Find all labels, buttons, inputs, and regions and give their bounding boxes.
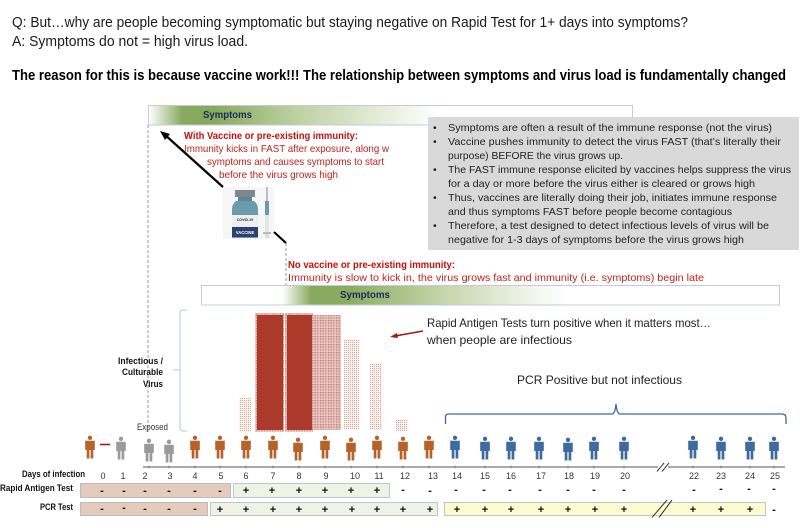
red text: with vaccine: With Vaccine or pre-existing immunity:: [184, 130, 358, 142]
row: rapid antigen test: -: [538, 484, 542, 496]
grey panel: key points: Vaccine pushes immunity to detect the virus FAST (that’s literally their: [448, 136, 782, 148]
dashed onset line: vaccinated: [147, 125, 149, 432]
day numbers: 7: [270, 471, 276, 481]
row: rapid antigen test: -: [167, 485, 171, 497]
row: rapid antigen test: -: [592, 484, 596, 496]
arrow: to infectious bars: [390, 331, 423, 338]
row: rapid antigen test: -: [719, 483, 723, 495]
day numbers: 22: [689, 471, 699, 481]
row: PCR test: -: [193, 503, 197, 515]
question and answer text: [12, 15, 688, 50]
day numbers: 11: [374, 471, 384, 481]
timeline axis: [143, 463, 785, 472]
grey panel: key points: negative for 1-3 days of symptoms before the virus grows high: [448, 234, 744, 246]
day numbers: 6: [243, 471, 249, 481]
row: rapid antigen test: -: [218, 485, 222, 497]
grey panel: key points: [428, 117, 799, 250]
icon: vaccine vial and syringe: COVID-19: [237, 218, 253, 222]
row: PCR test: +: [718, 504, 724, 516]
row: rapid antigen test: +: [348, 485, 354, 497]
row: PCR test: +: [349, 504, 355, 516]
dashed onset line: no vaccine: [285, 243, 287, 285]
question and answer text: Q: But…why are people becoming symptomatic but staying negative on Rapid Test for 1+ days into symptoms?: [12, 15, 688, 31]
arrow stub: vaccine to no-vaccine path: [274, 232, 286, 243]
day numbers: 17: [536, 471, 546, 481]
bar chart: infectious virus by day: [239, 313, 408, 432]
day numbers: 5: [218, 471, 224, 481]
people: blue non-infectious: [450, 436, 779, 460]
row: PCR test: +: [270, 504, 276, 516]
row: rapid antigen test: -: [747, 483, 751, 495]
people: orange infectious: [190, 436, 434, 460]
grey panel: key points: •: [433, 164, 437, 176]
day numbers: 12: [400, 471, 410, 481]
day numbers: 15: [480, 471, 490, 481]
row: PCR test: +: [592, 504, 598, 516]
callout: rapid antigen tests: when people are infectious: [426, 333, 572, 347]
row: rapid antigen test: -: [143, 485, 147, 497]
day numbers: 9: [323, 471, 329, 481]
day numbers: 23: [716, 471, 726, 481]
row: rapid antigen test: +: [322, 485, 328, 497]
bracket: PCR positive period: [446, 404, 786, 424]
row: rapid antigen test: +: [243, 485, 249, 497]
grey panel: key points: Therefore, a test designed to detect infectious levels of virus will be: [448, 220, 769, 232]
row: PCR test: +: [454, 504, 460, 516]
red text: no vaccine: [288, 259, 704, 284]
row: PCR test: +: [374, 504, 380, 516]
grey panel: key points: and thus symptoms FAST before people become contagious: [448, 206, 732, 218]
arrow: transmission: [100, 444, 110, 446]
label: infectious / culturable virus: Infectious /: [118, 356, 163, 367]
day numbers: 1: [120, 471, 126, 481]
label: infectious / culturable virus: [118, 356, 163, 390]
day numbers: 20: [620, 471, 630, 481]
row: PCR test: -: [772, 504, 776, 516]
row: PCR test: +: [322, 504, 328, 516]
label: days of infection: Days of infection: [22, 469, 85, 480]
row: rapid antigen test: +: [269, 485, 275, 497]
people row: [85, 436, 779, 462]
red text: with vaccine: symptoms and causes symptoms to start: [207, 156, 384, 168]
people: orange index case: [85, 436, 95, 458]
row: rapid antigen test: [0, 483, 776, 498]
day numbers: 4: [192, 471, 198, 481]
row: rapid antigen test: Rapid Antigen Test: [0, 483, 74, 494]
row: rapid antigen test: -: [508, 484, 512, 496]
day numbers: 3: [167, 471, 173, 481]
day numbers: 14: [452, 471, 462, 481]
grey panel: key points: •: [433, 136, 437, 148]
symptoms bar: no vaccine: [202, 286, 780, 305]
row: PCR test: +: [508, 504, 514, 516]
red text: with vaccine: Immunity kicks in FAST after exposure, along w: [184, 143, 389, 155]
callout: rapid antigen tests: Rapid Antigen Tests turn positive when it matters most…: [427, 316, 711, 330]
bracket: infectious virus: [173, 310, 187, 431]
row: rapid antigen test: -: [100, 485, 104, 497]
day numbers: 24: [745, 471, 755, 481]
row: PCR test: +: [482, 504, 488, 516]
row: rapid antigen test: +: [374, 485, 380, 497]
symptoms bar: vaccinated: [148, 106, 632, 125]
grey panel: key points: The FAST immune response elicited by vaccines helps suppress the virus: [448, 164, 791, 176]
day numbers: 19: [590, 471, 600, 481]
row: rapid antigen test: -: [193, 485, 197, 497]
row: rapid antigen test: -: [622, 484, 626, 496]
row: rapid antigen test: -: [401, 484, 405, 496]
row: PCR test: +: [427, 504, 433, 516]
row: rapid antigen test: -: [482, 484, 486, 496]
row: PCR test: [40, 500, 776, 518]
row: rapid antigen test: -: [122, 485, 126, 497]
row: PCR test: +: [690, 504, 696, 516]
row: PCR test: +: [747, 504, 753, 516]
grey panel: key points: •: [433, 220, 437, 232]
row: PCR test: -: [167, 503, 171, 515]
grey panel: key points: •: [433, 192, 437, 204]
grey panel: key points: purpose) BEFORE the virus grows up.: [448, 150, 623, 162]
red text: no vaccine: Immunity is slow to kick in, the virus grows fast and immunity (i.e. symptoms) begin late: [288, 272, 704, 284]
day numbers: 25: [770, 471, 780, 481]
red text: with vaccine: [184, 130, 389, 181]
row: PCR test: +: [400, 504, 406, 516]
callout: PCR positive but not infectious: PCR Positive but not infectious: [517, 373, 682, 387]
row: PCR test: +: [243, 504, 249, 516]
row: rapid antigen test: +: [296, 485, 302, 497]
row: rapid antigen test: -: [454, 484, 458, 496]
day numbers: 8: [296, 471, 302, 481]
day numbers: 0: [100, 471, 106, 481]
label: infectious / culturable virus: Culturable: [122, 367, 163, 378]
day numbers: 18: [564, 471, 574, 481]
row: PCR test: +: [565, 504, 571, 516]
question and answer text: A: Symptoms do not = high virus load.: [12, 34, 248, 50]
row: PCR test: +: [217, 504, 223, 516]
icon: vaccine vial and syringe: VACCINE: [236, 230, 254, 235]
red text: with vaccine: before the virus grows high: [219, 169, 338, 181]
label: infectious / culturable virus: Virus: [143, 379, 163, 390]
day numbers: 10: [350, 471, 360, 481]
row: rapid antigen test: -: [692, 484, 696, 496]
row: PCR test: +: [538, 504, 544, 516]
row: rapid antigen test: -: [566, 484, 570, 496]
row: PCR test: +: [296, 504, 302, 516]
label: exposed: Exposed: [137, 422, 168, 433]
red text: no vaccine: No vaccine or pre-existing immunity:: [288, 259, 455, 271]
row: PCR test: -: [143, 503, 147, 515]
row: PCR test: PCR Test: [40, 502, 74, 513]
grey panel: key points: Symptoms are often a result of the immune response (not the virus): [448, 122, 772, 134]
day numbers: [100, 471, 780, 481]
callout: rapid antigen tests: [426, 316, 711, 347]
row: rapid antigen test: -: [428, 485, 432, 497]
row: rapid antigen test: -: [772, 483, 776, 495]
row: PCR test: -: [100, 503, 104, 515]
symptoms bar: no vaccine: Symptoms: [340, 289, 390, 301]
arrow: vaccine to early symptoms: [160, 131, 223, 187]
row: PCR test: -: [122, 502, 126, 514]
grey panel: key points: for a day or more before the virus either is cleared or grows high: [448, 178, 755, 190]
symptoms bar: vaccinated: Symptoms: [203, 109, 252, 121]
day numbers: 13: [428, 471, 438, 481]
grey panel: key points: •: [433, 122, 437, 134]
row: PCR test: +: [621, 504, 627, 516]
people: grey pre-infectious: [116, 437, 174, 462]
icon: vaccine vial and syringe: [223, 187, 274, 239]
day numbers: 2: [142, 471, 148, 481]
grey panel: key points: Thus, vaccines are literally doing their job, initiates immune response: [448, 192, 777, 204]
day numbers: 16: [506, 471, 516, 481]
